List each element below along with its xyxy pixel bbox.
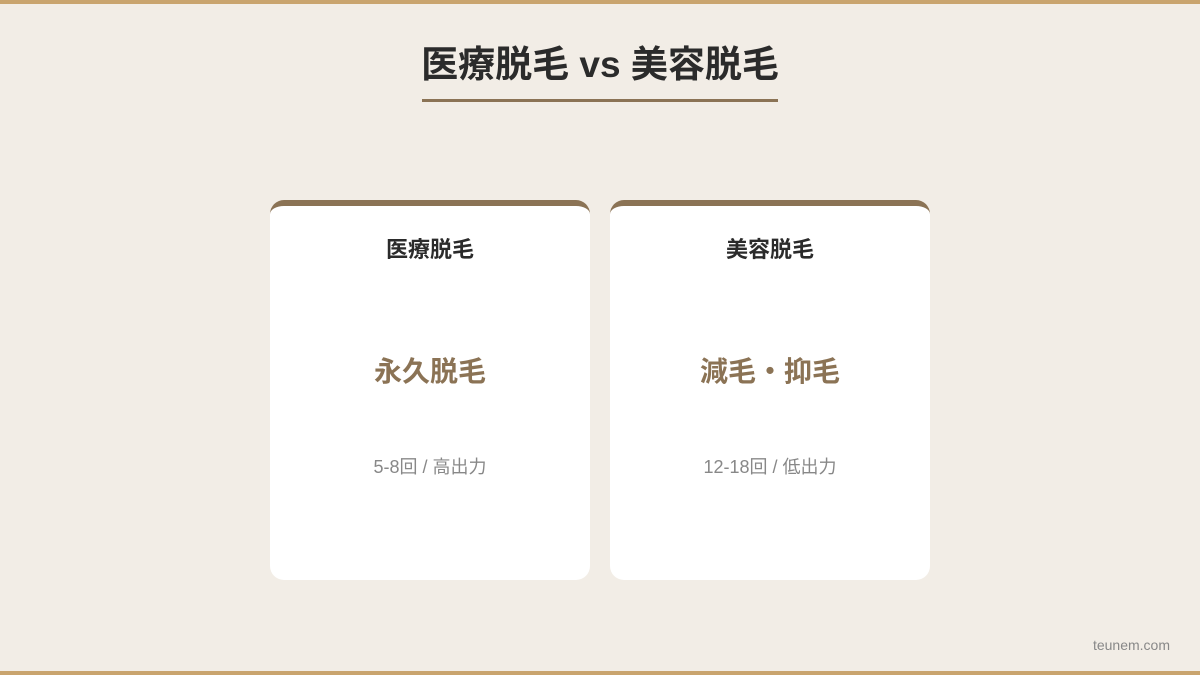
- footer: teunem.com: [1093, 637, 1170, 653]
- main result: 永久脱毛: [374, 356, 486, 387]
- panel: beauty: [610, 200, 930, 580]
- panel heading: 医療脱毛: [386, 237, 474, 262]
- main result: 減毛・抑毛: [700, 356, 840, 387]
- detail: 5-8回 / 高出力: [373, 457, 487, 477]
- title: 医療脱毛 vs 美容脱毛: [421, 44, 779, 85]
- detail: 12-18回 / 低出力: [703, 457, 837, 477]
- panel heading: 美容脱毛: [726, 237, 814, 262]
- panel: medical: [270, 200, 590, 580]
